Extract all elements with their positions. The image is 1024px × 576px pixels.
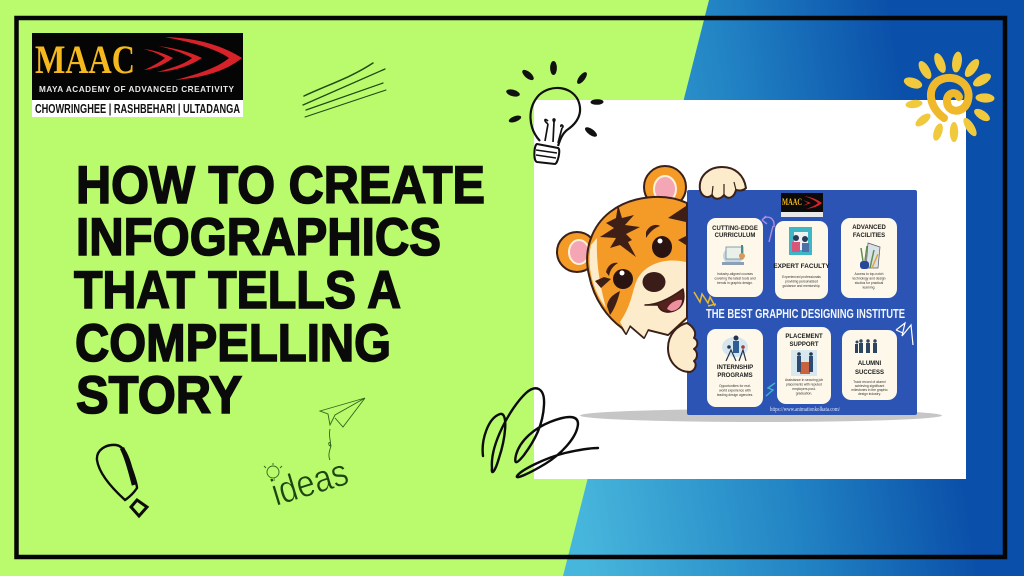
card: internship programs: world experience with — [719, 388, 751, 392]
doodle: black swirl — [483, 388, 598, 477]
card: advanced facilities: Access to top-notch — [855, 272, 884, 276]
doodle: white zigzag — [896, 323, 913, 345]
card: alumni success: Track record of alumni — [853, 380, 886, 384]
tiger lower paw — [668, 323, 697, 372]
card: placement support: SUPPORT — [789, 342, 819, 348]
board mini logo: MAAC — [782, 197, 802, 207]
title: COMPELLING — [75, 314, 391, 373]
tiger head — [587, 197, 687, 338]
logo wordmark: MAAC — [35, 37, 135, 82]
icon: light bulb with rays — [505, 61, 604, 164]
card: alumni success: SUCCESS — [855, 370, 884, 376]
title: STORY — [76, 366, 242, 425]
tiger nose — [642, 272, 666, 292]
text: ideas: ideas — [266, 452, 353, 515]
title: INFOGRAPHICS — [76, 208, 441, 267]
card: cutting-edge curriculum: CUTTING-EDGE — [712, 226, 758, 232]
card: expert faculty: Experienced professionals — [782, 275, 821, 279]
tiger right eye — [652, 236, 672, 258]
card: internship programs: leading design agencies. — [717, 393, 753, 397]
tiger left cheek highlight — [589, 238, 606, 308]
card: cutting-edge curriculum: covering the latest tools and — [714, 276, 756, 280]
doodle: yellow zigzag — [694, 292, 716, 306]
card: placement support: Assistance in securing job — [785, 378, 823, 382]
card: placement support: graduation. — [796, 392, 812, 396]
mascot: tiger — [557, 166, 746, 372]
illustration: facilities — [860, 243, 880, 269]
card: advanced facilities — [841, 218, 897, 298]
card: placement support: placements with reputed — [786, 382, 822, 386]
card: alumni success — [842, 330, 897, 400]
doodle: purple arrow — [762, 216, 774, 242]
card: expert faculty: providing personalized — [785, 280, 818, 284]
illustration: curriculum — [722, 245, 745, 265]
tiger left ear — [557, 232, 597, 272]
icon: paper plane — [320, 398, 365, 460]
illustration: internship — [722, 336, 748, 361]
card: alumni success: ALUMNI — [858, 361, 881, 367]
tiger right ear — [644, 166, 686, 208]
tiger stripes — [595, 205, 686, 315]
card: advanced facilities: studios for practical — [855, 281, 883, 285]
card: internship programs: INTERNSHIP — [717, 365, 753, 371]
card: expert faculty: EXPERT FACULTY — [773, 263, 830, 270]
bulb rays — [505, 61, 604, 138]
illustration: faculty — [789, 227, 812, 255]
illustration: alumni — [855, 339, 877, 353]
card: internship programs: Opportunities for real- — [719, 384, 751, 388]
card: cutting-edge curriculum: trends in graphic design. — [717, 281, 753, 285]
card: advanced facilities: learning. — [863, 286, 875, 290]
title: HOW TO CREATE — [76, 156, 485, 215]
board shadow — [580, 409, 942, 422]
card: placement support: employers post- — [792, 387, 816, 391]
illustration: placement — [791, 350, 817, 376]
card: expert faculty: guidance and mentorship. — [783, 284, 821, 288]
tiger muzzle — [620, 261, 686, 337]
card: cutting-edge curriculum — [707, 218, 763, 297]
white image panel — [534, 100, 966, 479]
plane trail — [329, 429, 331, 460]
tiger top paw — [700, 167, 746, 199]
infographic board — [687, 190, 917, 415]
card: placement support: PLACEMENT — [785, 334, 823, 340]
board URL: https://www.animationkolkata.com/ — [770, 407, 840, 413]
title: THAT TELLS A — [74, 261, 401, 320]
card: placement support — [777, 327, 831, 404]
card: advanced facilities: technology and design — [852, 276, 886, 280]
icon: small ideas bulb — [264, 463, 282, 480]
background: blue diagonal gradient — [563, 0, 1024, 576]
icon: hand-drawn exclamation bulb — [97, 445, 147, 516]
doodle: teal squiggle — [766, 383, 775, 396]
board mini logo — [781, 193, 823, 217]
card: expert faculty — [773, 221, 830, 299]
card: cutting-edge curriculum: Industry-aligned courses — [717, 272, 753, 276]
logo red chevrons — [143, 37, 242, 80]
card: alumni success: milestones in the graphic — [851, 388, 888, 392]
decorative sketch lines — [303, 63, 386, 117]
card: internship programs: PROGRAMS — [717, 373, 753, 379]
logo tagline: MAYA ACADEMY OF ADVANCED CREATIVITY — [39, 85, 235, 94]
card: internship programs — [707, 329, 763, 407]
board heading: THE BEST GRAPHIC DESIGNING INSTITUTE — [706, 307, 905, 321]
tiger left eye — [613, 269, 633, 289]
card: cutting-edge curriculum: CURRICULUM — [715, 233, 755, 239]
title — [74, 156, 485, 425]
tiger mouth — [645, 289, 684, 312]
card: advanced facilities: ADVANCED — [852, 225, 886, 231]
card: advanced facilities: FACILITIES — [853, 233, 885, 239]
logo locations: CHOWRINGHEE | RASHBEHARI | ULTADANGA — [35, 102, 240, 116]
card: alumni success: design industry. — [858, 392, 881, 396]
card: alumni success: achieving significant — [855, 384, 884, 388]
icon: yellow sun — [902, 51, 995, 142]
logo: MAAC — [32, 33, 243, 117]
sun spiral — [931, 78, 969, 118]
